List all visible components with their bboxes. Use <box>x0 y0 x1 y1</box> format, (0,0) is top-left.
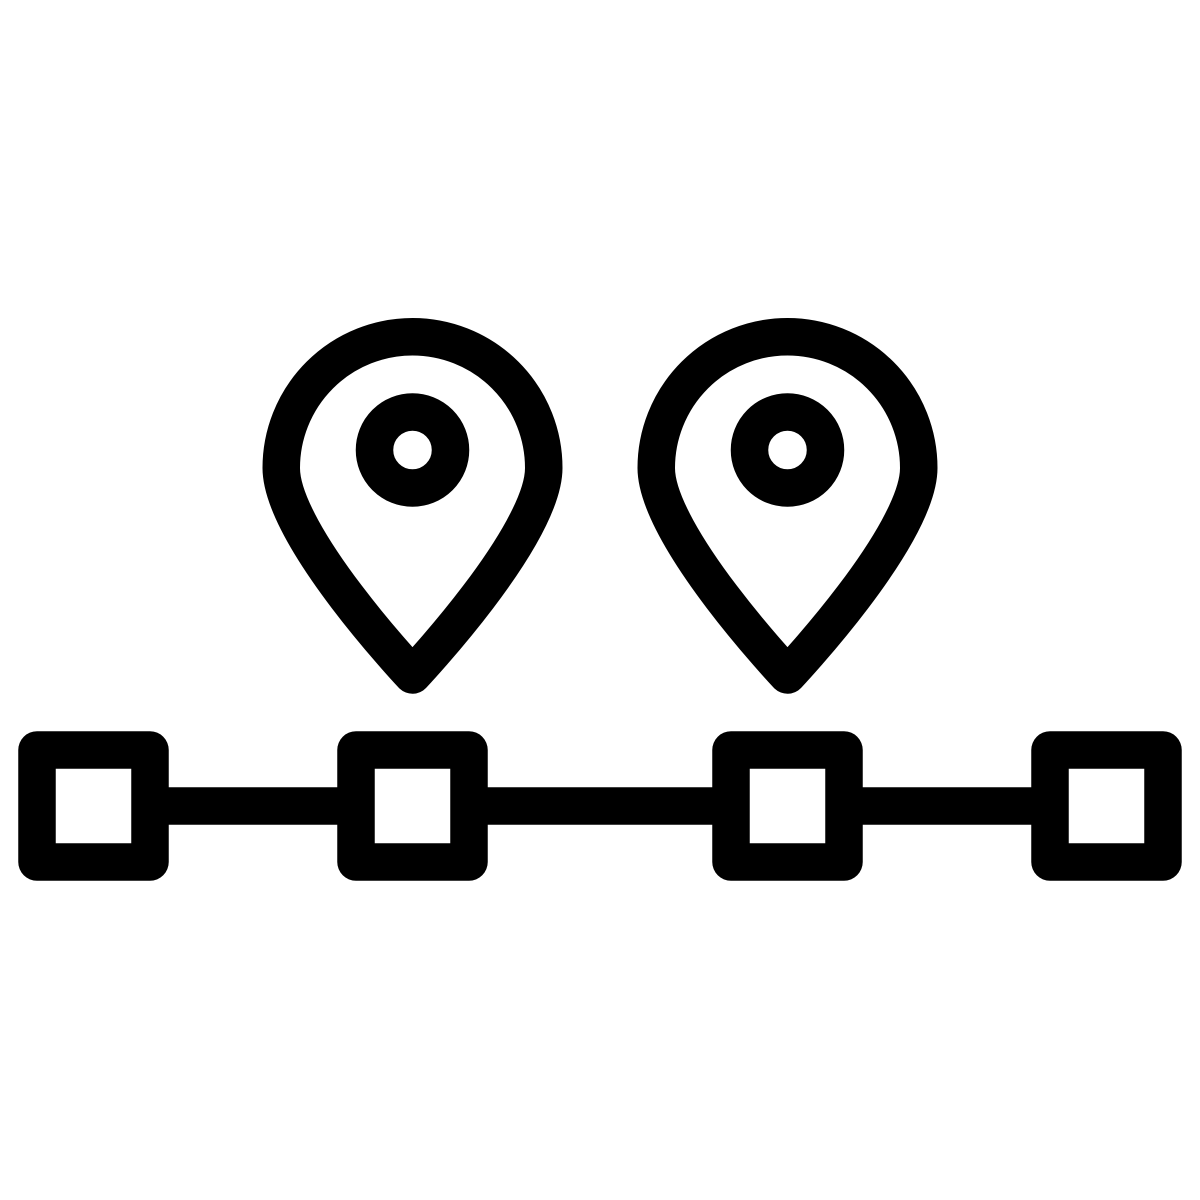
icon: right map pin <box>656 337 919 675</box>
icon: left map pin <box>281 337 544 675</box>
square stop 1 <box>37 750 150 862</box>
square stop 2 <box>356 750 469 862</box>
square stop 3 <box>731 750 844 862</box>
square stop 4 <box>1050 750 1163 862</box>
route segment 3 <box>862 787 1032 825</box>
route line with four square stops <box>37 750 1163 862</box>
route segment 2 <box>487 787 713 825</box>
route segment 1 <box>168 787 338 825</box>
